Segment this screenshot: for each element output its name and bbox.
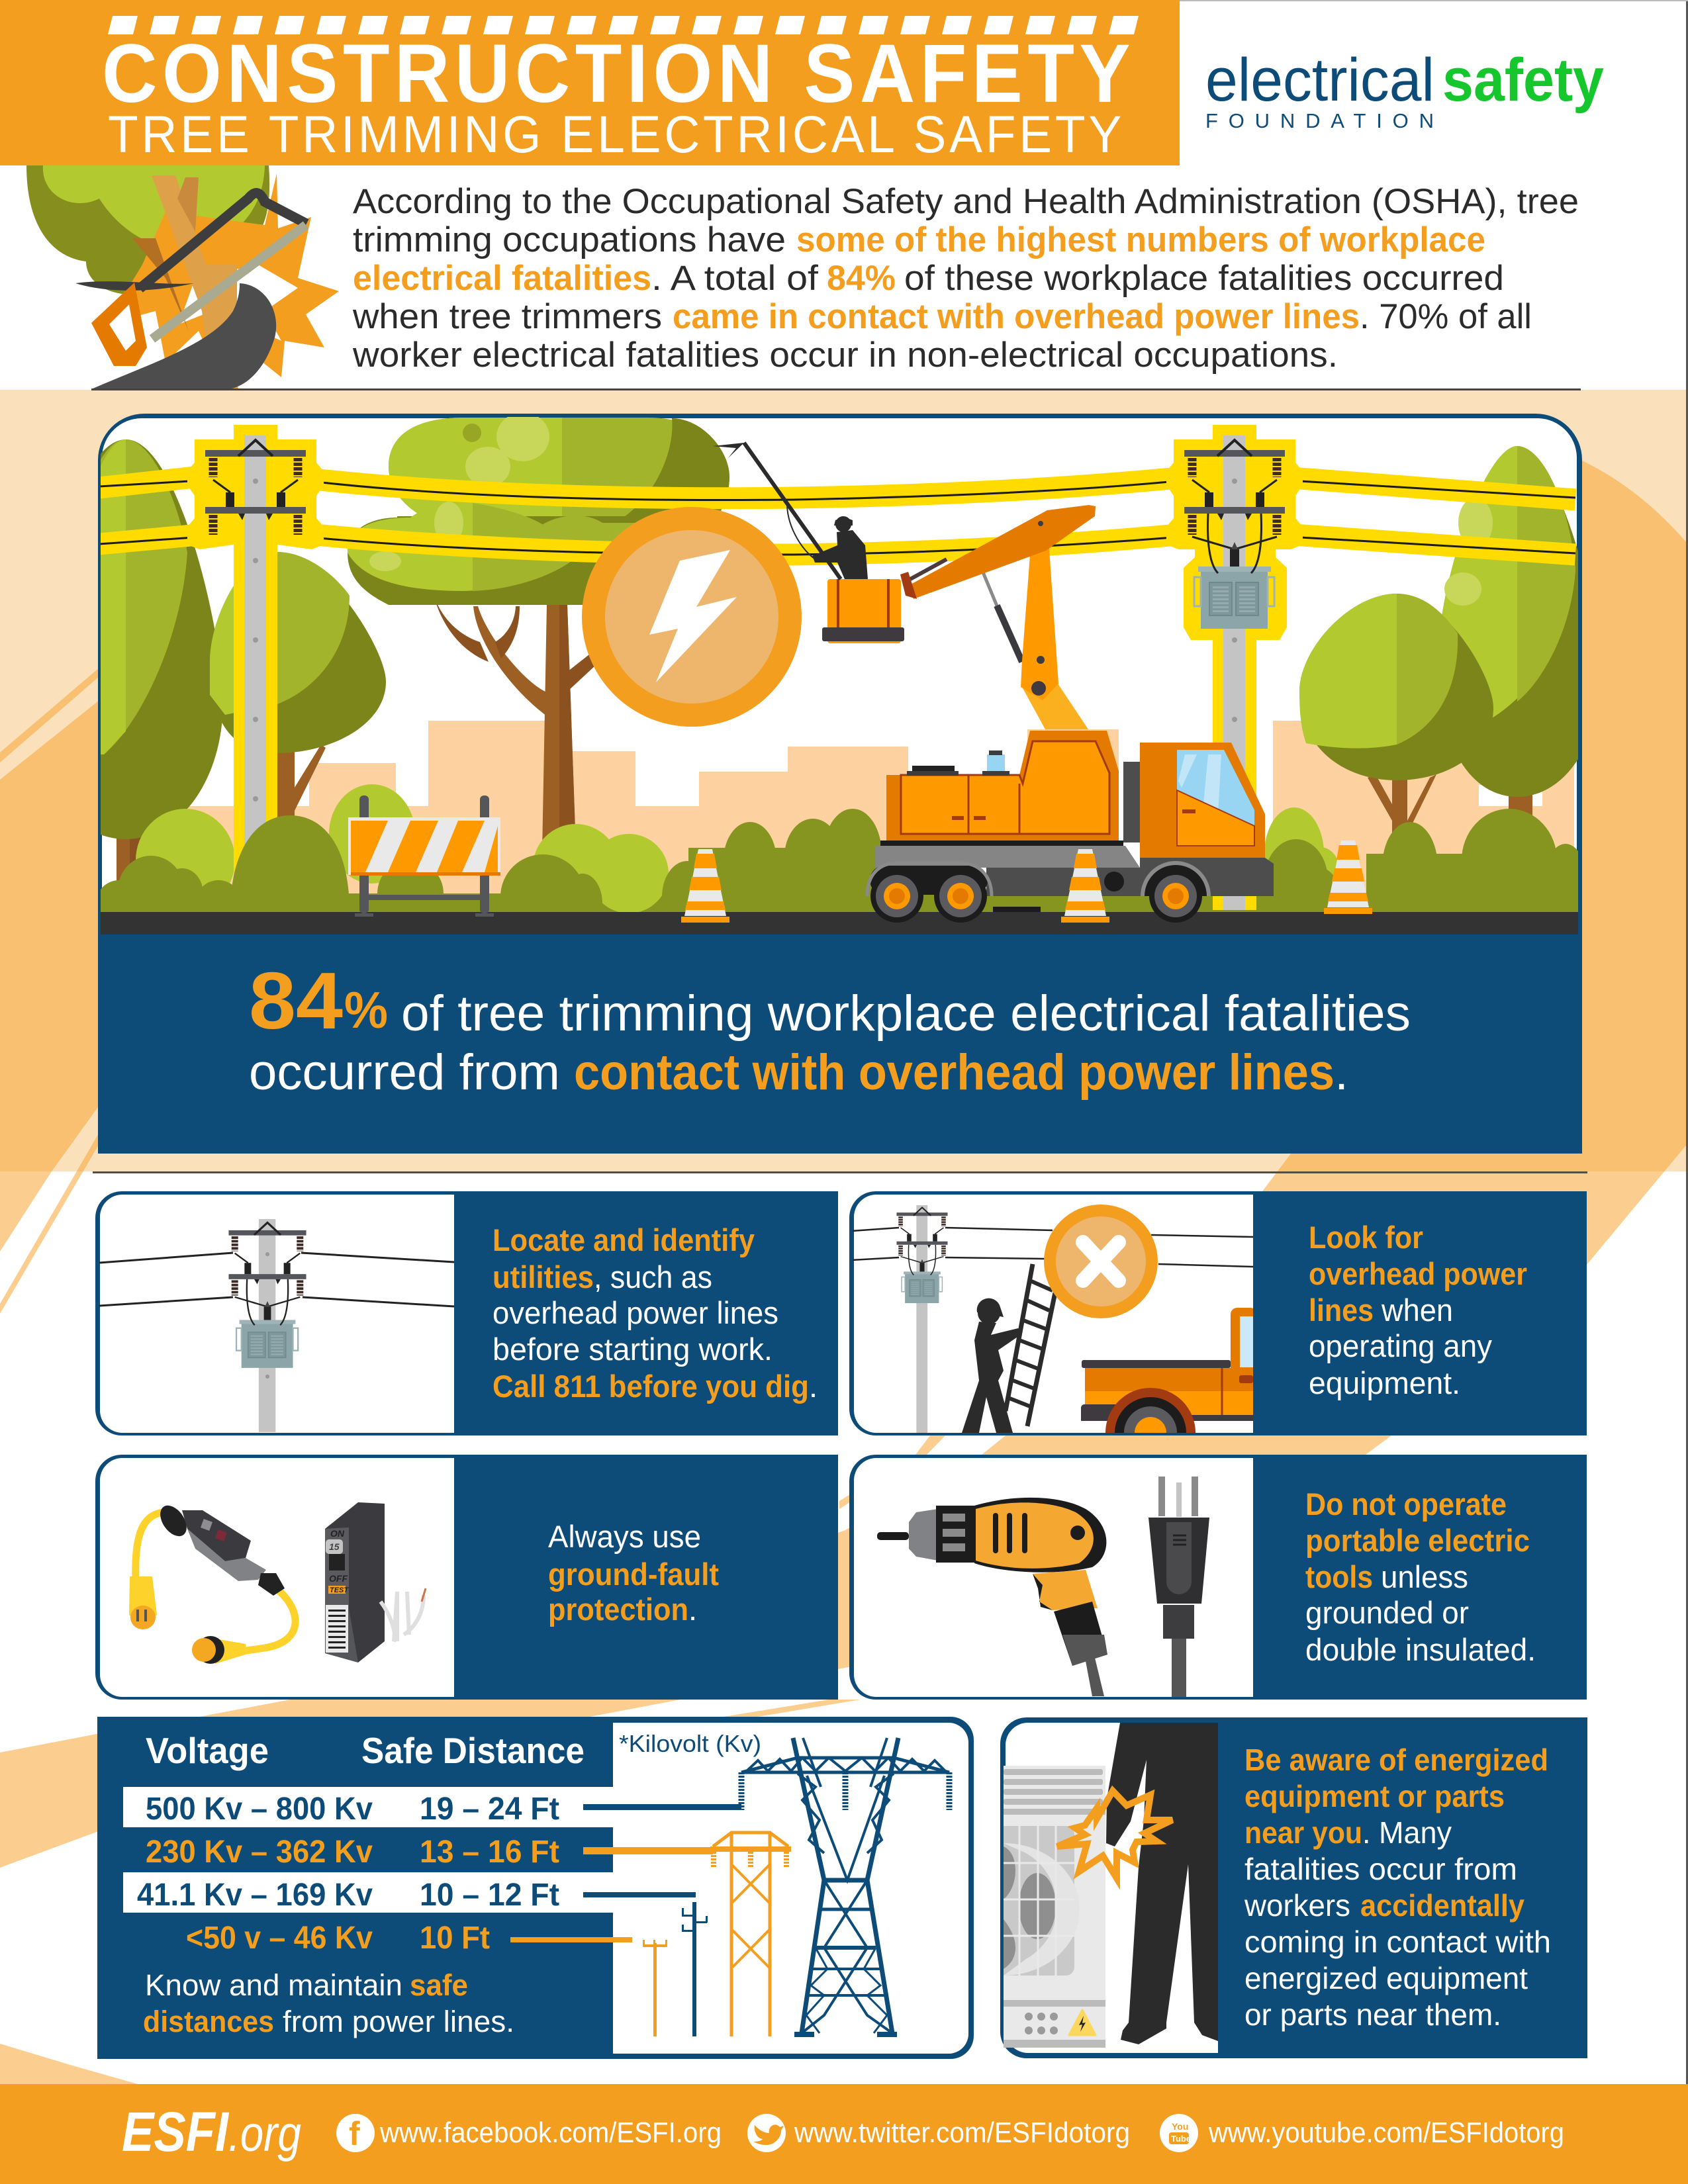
text: locate and identify: overhead power lines (492, 1295, 778, 1330)
panel: look for overhead power lines (849, 1191, 1587, 1478)
intro text block: of these workplace fatalities occurred (904, 259, 1504, 298)
callout: 84% statistic (249, 956, 1411, 1101)
traffic cone by truck (1061, 849, 1109, 923)
panel: ground-fault protection (95, 1455, 838, 1700)
right utility pole with transformer (1166, 425, 1303, 910)
road (101, 912, 1578, 934)
tree: behind left pole (210, 552, 386, 834)
bucket truck (713, 443, 1274, 923)
icon: circuit breaker (325, 1502, 426, 1662)
pickup truck (1081, 1308, 1257, 1478)
power lines glow (99, 475, 1575, 555)
foreground bush over left pole (230, 815, 350, 912)
icon: small orange pole (643, 1940, 667, 2036)
text: be aware: equipment or parts (1244, 1779, 1505, 1813)
panel: hero scene (28, 412, 1602, 1154)
text: know and maintain: safe (410, 1968, 468, 2002)
text: always use ground-fault (548, 1519, 719, 1627)
tree: far left (101, 439, 222, 880)
text: know and maintain: from power lines. (283, 2005, 514, 2038)
text: be aware (1244, 1743, 1551, 2032)
text: look for overhead lines: operating any (1309, 1328, 1492, 1363)
distance leader lines (510, 1804, 741, 1942)
intro text block: . 70% of all (1360, 297, 1532, 336)
text: be aware: Be aware of energized (1244, 1743, 1548, 1777)
text: know and maintain (143, 1968, 514, 2038)
illustration: air conditioner unit (1004, 1766, 1105, 2048)
link: twitter: www.twitter.com/ESFIdotorg (794, 2116, 1130, 2149)
ladder (1006, 1264, 1055, 1426)
left utility pole (187, 425, 324, 910)
callout: 84% statistic: occurred from (249, 1044, 560, 1101)
text: look for overhead lines: Look for (1309, 1220, 1423, 1255)
footer brand: ESFI.org: .org (228, 2106, 301, 2162)
title: CONSTRUCTION SAFETY (102, 28, 1135, 120)
logo: electrical safety foundation: FOUNDATION (1205, 109, 1434, 132)
text: locate and identify: . (809, 1369, 818, 1404)
callout: 84% statistic: 84 (249, 956, 343, 1046)
intro text block: 84% (827, 259, 896, 298)
text: be aware: or parts near them. (1244, 1997, 1501, 2032)
text: locate and identify (492, 1222, 818, 1404)
text: locate and identify: utilities (492, 1259, 594, 1295)
icon: facebook (336, 2114, 375, 2152)
icon: lightning bolt badge (582, 507, 802, 727)
illustration: worker, ladder, pickup (851, 1205, 1257, 1478)
tree: center with crown (348, 417, 729, 841)
icon: youtube: You (1172, 2121, 1188, 2132)
icon: tree, saw and spark (26, 165, 339, 389)
tree: right foreground (1299, 594, 1493, 833)
illustration: person silhouette (1106, 1723, 1218, 2044)
voltage table: 41.1 Kv – 169 Kv (137, 1878, 373, 1913)
text: look for overhead lines: when (1381, 1293, 1453, 1328)
ground (348, 893, 1578, 912)
text: be aware: fatalities occur from (1244, 1852, 1517, 1886)
text: be aware: workers (1244, 1888, 1350, 1923)
text: do not operate: double insulated. (1305, 1632, 1536, 1667)
panel: energized equipment (1000, 1717, 1587, 2058)
footer brand: ESFI.org: ESFI (122, 2101, 229, 2163)
intro text block: worker electrical fatalities occur in non-electrical occupations. (352, 336, 1338, 375)
text: do not operate: unless (1381, 1559, 1468, 1594)
icon: facebook: f (349, 2115, 360, 2152)
intro text block: when tree trimmers (352, 297, 662, 336)
icon: circuit breaker: TEST (330, 1586, 349, 1594)
text: be aware: . Many (1362, 1815, 1452, 1850)
icon: shock burst (1057, 1791, 1172, 1878)
text: know and maintain: Know and maintain (145, 1968, 402, 2002)
voltage table: 10 – 12 Ft (420, 1878, 559, 1913)
text: be aware: energized equipment (1244, 1961, 1528, 1995)
logo: electrical safety foundation: safety (1442, 46, 1604, 114)
dark bushes (101, 809, 1578, 912)
callout: 84% statistic: . (1335, 1044, 1348, 1101)
icon: power drill (877, 1498, 1107, 1696)
truck chassis (880, 841, 1123, 846)
icon: navy transmission tower (741, 1738, 949, 2037)
worker (835, 516, 851, 532)
footer bar (0, 2084, 1688, 2184)
text: do not operate (1305, 1486, 1536, 1667)
intro text block: . A total of (651, 259, 818, 298)
intro text block: trimming occupations have (353, 220, 786, 259)
icon: navy pole (682, 1902, 708, 2036)
voltage table: 230 Kv – 362 Kv (146, 1835, 373, 1870)
voltage table: 500 Kv – 800 Kv (146, 1792, 373, 1827)
panel: portable electric tools (849, 1455, 1587, 1700)
light bushes (136, 784, 1340, 913)
text: locate and identify: before starting work. (492, 1332, 773, 1367)
intro text block: electrical fatalities (353, 259, 651, 298)
callout: 84% statistic: of tree trimming workplace electrical fatalities (401, 985, 1411, 1042)
footer brand: ESFI.org (122, 2101, 301, 2163)
panel: locate and identify utilities (95, 1191, 838, 1435)
text: always use ground-fault: protection (548, 1592, 688, 1627)
callout: 84% statistic: % (344, 981, 388, 1039)
voltage table: 13 – 16 Ft (420, 1835, 559, 1870)
voltage table (123, 1730, 613, 1956)
icon: GFCI cord (129, 1501, 295, 1664)
truck equipment body (886, 731, 1119, 841)
icon: electric plug (1149, 1477, 1209, 1697)
icon: utility pole with transformer (99, 1219, 454, 1432)
text: know and maintain: distances (143, 2005, 274, 2038)
icon: circuit breaker: ON (330, 1528, 345, 1539)
text: do not operate: tools (1305, 1559, 1373, 1594)
icon: orange lattice tower (710, 1833, 791, 2036)
header banner (0, 0, 1180, 165)
logo: electrical safety foundation: electrical (1205, 46, 1434, 114)
aerial bucket (827, 579, 901, 643)
icon: no X badge (1044, 1205, 1158, 1318)
worker silhouette (962, 1298, 1021, 1433)
footnote: kilovolt: *Kilovolt (Kv) (619, 1730, 761, 1757)
icon: twitter (747, 2114, 786, 2152)
link: facebook: www.facebook.com/ESFI.org (379, 2116, 722, 2149)
text: always use ground-fault: Always use (548, 1519, 701, 1554)
traffic cone right (1324, 841, 1372, 914)
tree: far right (1442, 446, 1578, 815)
logo: electrical safety foundation (1205, 46, 1604, 132)
icon: circuit breaker: OFF (329, 1573, 348, 1584)
text: do not operate: grounded or (1305, 1595, 1469, 1630)
text: be aware: coming in contact with (1244, 1925, 1551, 1959)
voltage table: Safe Distance (361, 1730, 585, 1771)
text: be aware: near you (1244, 1815, 1362, 1850)
icon: youtube: Tube (1171, 2134, 1191, 2144)
text: always use ground-fault: ground-fault (548, 1557, 719, 1592)
text: be aware: accidentally (1360, 1888, 1524, 1923)
panel: safe distances (97, 1717, 974, 2059)
text: locate and identify: Locate and identify (492, 1222, 755, 1257)
barricade (348, 796, 500, 917)
voltage table: 10 Ft (420, 1921, 490, 1956)
icon: circuit breaker: 15 (329, 1541, 340, 1552)
link: youtube: www.youtube.com/ESFIdotorg (1208, 2116, 1564, 2149)
text: do not operate: Do not operate (1305, 1486, 1507, 1522)
text: do not operate: portable electric (1305, 1523, 1530, 1558)
voltage table: Voltage (146, 1730, 269, 1771)
text: locate and identify: Call 811 before you dig (492, 1369, 809, 1404)
subtitle: TREE TRIMMING ELECTRICAL SAFETY (108, 105, 1125, 163)
truck cab (1140, 743, 1265, 858)
text: look for overhead lines: overhead power (1309, 1256, 1527, 1291)
intro text block: came in contact with overhead power lines (673, 297, 1360, 336)
traffic cone (681, 849, 729, 923)
text: always use ground-fault: . (688, 1592, 697, 1627)
callout: 84% statistic: contact with overhead power lines (574, 1044, 1335, 1101)
voltage table: <50 v – 46 Kv (186, 1921, 373, 1956)
text: look for overhead lines: lines (1309, 1293, 1374, 1328)
illustration: scene with trees, poles and truck (28, 412, 1602, 939)
intro text block (91, 182, 1581, 390)
intro text block: some of the highest numbers of workplace (796, 220, 1485, 259)
voltage table: 19 – 24 Ft (420, 1792, 559, 1827)
skyline buildings (188, 721, 1574, 912)
text: look for overhead lines: equipment. (1309, 1365, 1460, 1400)
intro text block: According to the Occupational Safety and Health Administration (OSHA), tree (353, 182, 1579, 221)
text: locate and identify: , such as (594, 1259, 712, 1295)
icon: youtube (1160, 2114, 1198, 2152)
text: look for overhead lines (1309, 1220, 1527, 1400)
